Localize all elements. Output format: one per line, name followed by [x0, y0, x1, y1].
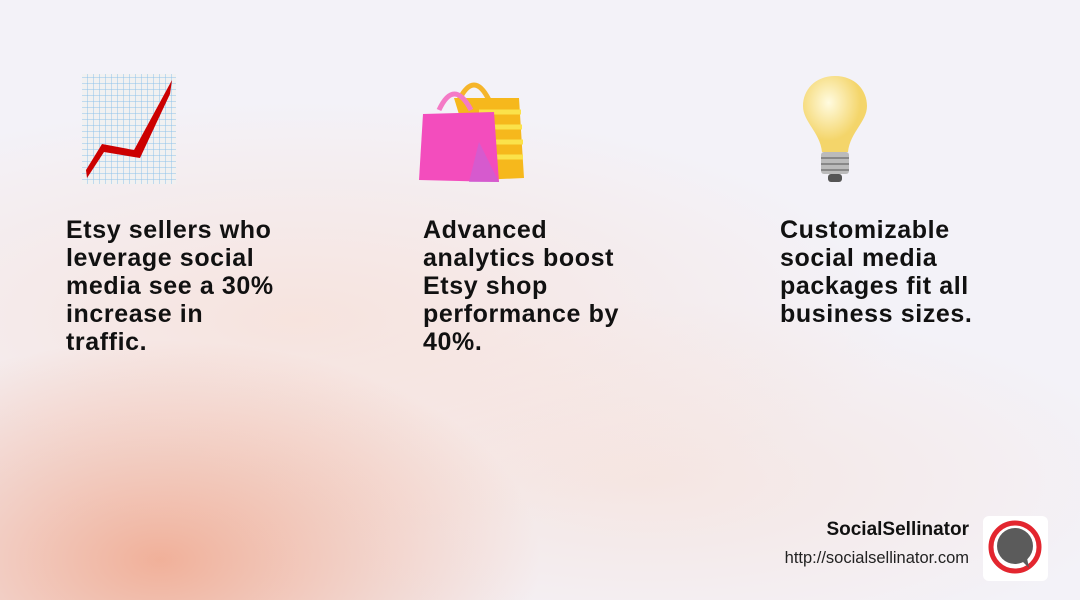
icon: light bulb — [803, 76, 867, 182]
icon: rising chart — [82, 74, 176, 184]
panel: analytics — [419, 82, 619, 356]
brand block — [785, 516, 1048, 581]
text: stat 1: Etsy sellers who leverage social media see a 30% increase in traffic. — [66, 216, 274, 356]
text: stat 2: Advanced analytics boost Etsy shop performance by 40%. — [423, 216, 619, 356]
panel: social traffic — [66, 74, 274, 356]
panel: packages — [780, 76, 972, 328]
icon: shopping bags — [419, 82, 524, 182]
text: stat 3: Customizable social media packages fit all business sizes. — [780, 216, 972, 328]
brand url: http://socialsellinator.com — [785, 549, 969, 567]
brand name: SocialSellinator — [826, 519, 969, 540]
logo — [983, 516, 1048, 581]
